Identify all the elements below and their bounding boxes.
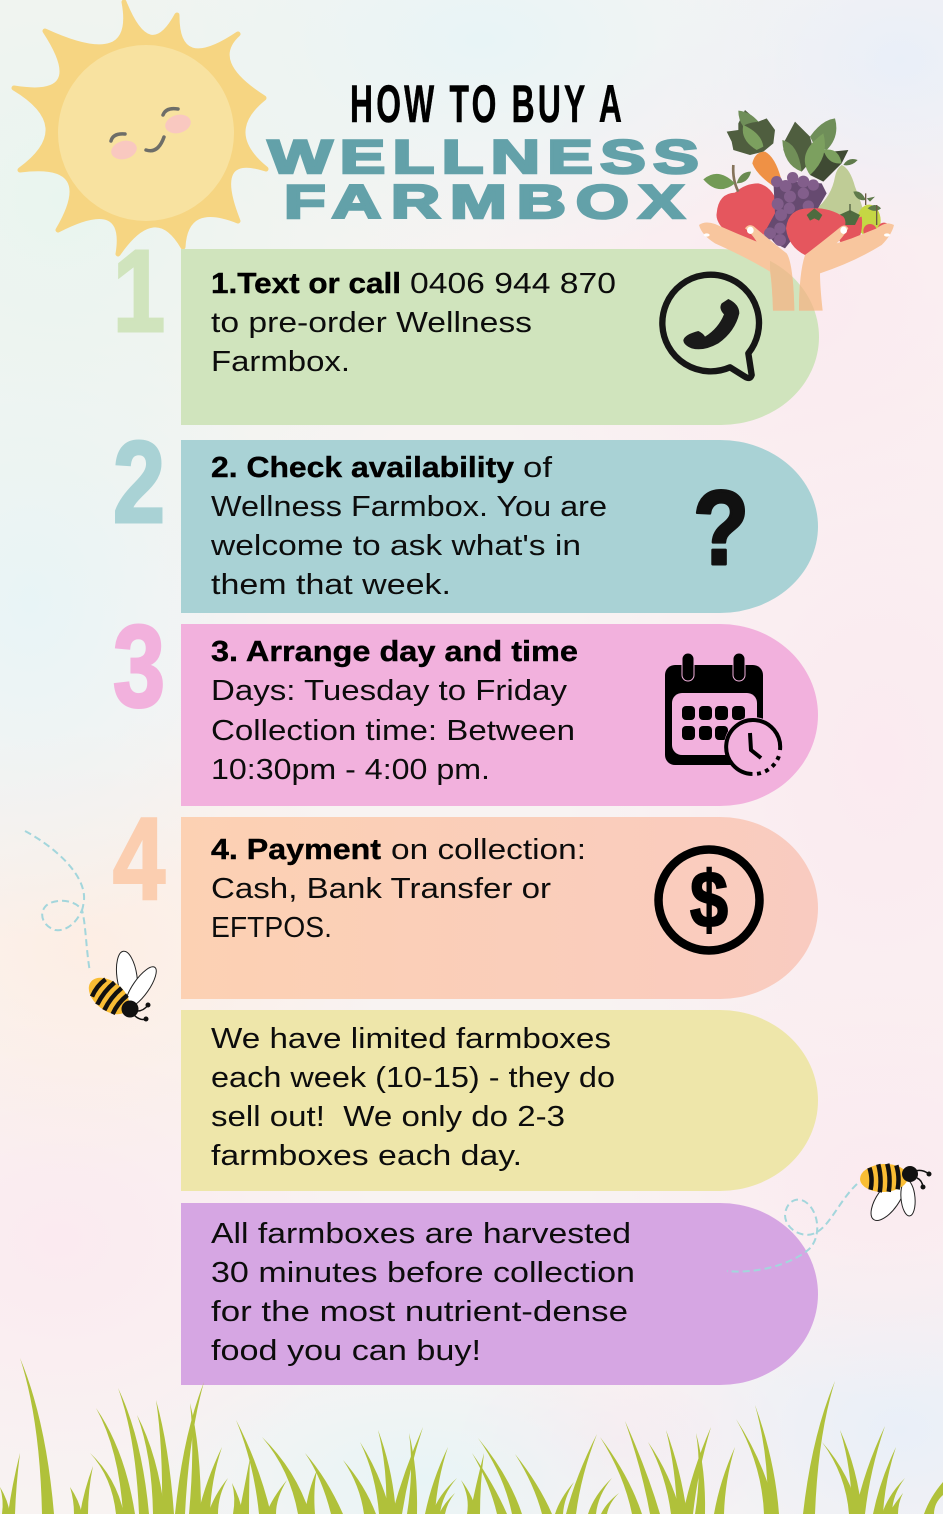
step 4 text: Cash, Bank Transfer or xyxy=(211,873,551,905)
step numeral 1: 1 xyxy=(113,226,165,356)
step 3 text: 3. Arrange day and time xyxy=(211,636,578,668)
step 2 text: welcome to ask what's in xyxy=(210,530,581,562)
panel: step 2 check availability xyxy=(181,440,818,613)
step 2 text: of xyxy=(523,452,553,484)
limited farmboxes text: We have limited farmboxes xyxy=(211,1023,611,1055)
step 1 text xyxy=(211,268,616,378)
icon: phone speech bubble xyxy=(662,275,759,378)
harvest text xyxy=(211,1218,635,1367)
panel: step 3 arrange day and time xyxy=(181,624,818,806)
panel: harvest note xyxy=(181,1203,818,1385)
icon: smiling sun xyxy=(14,2,266,254)
panel: step 1 text or call xyxy=(181,249,819,425)
step numeral 4: 4 xyxy=(113,794,165,924)
step 4 text xyxy=(211,834,586,944)
step 4 text: EFTPOS. xyxy=(211,912,332,944)
title line: farmbox: FARMBOX xyxy=(284,176,684,228)
limited farmboxes text: sell out! We only do 2-3 xyxy=(211,1101,565,1133)
icon: bee with dashed flight path, left xyxy=(25,831,161,1022)
limited farmboxes text xyxy=(211,1023,615,1172)
step 3 text xyxy=(211,636,578,786)
step numeral 2: 2 xyxy=(113,417,165,547)
harvest text: 30 minutes before collection xyxy=(211,1257,635,1289)
panel: limited farmboxes note xyxy=(181,1010,818,1191)
harvest text: for the most nutrient-dense xyxy=(211,1296,628,1328)
step 1 text: to pre-order Wellness xyxy=(211,307,532,339)
step 2 text: them that week. xyxy=(211,569,451,601)
icon: dollar coin xyxy=(658,850,760,950)
icon: bee with dashed flight path, right xyxy=(727,1163,932,1272)
step 3 text: Collection time: Between xyxy=(211,715,575,747)
step 2 text: 2. Check availability xyxy=(211,452,514,484)
icon: question mark: ? xyxy=(693,470,749,587)
step 2 text xyxy=(210,452,607,601)
limited farmboxes text: farmboxes each day. xyxy=(211,1140,522,1172)
title line: how to buy a: HOW TO BUY A xyxy=(350,75,622,134)
step 1 text: Farmbox. xyxy=(211,346,350,378)
step 2 text: Wellness Farmbox. You are xyxy=(211,491,607,523)
step 4 text: 4. Payment xyxy=(211,834,381,866)
harvest text: food you can buy! xyxy=(211,1335,481,1367)
harvest text: All farmboxes are harvested xyxy=(211,1218,631,1250)
step 3 text: 10:30pm - 4:00 pm. xyxy=(211,754,490,786)
step numeral 3: 3 xyxy=(113,601,165,731)
step 1 text: 0406 944 870 xyxy=(410,268,616,300)
step 1 text: 1.Text or call xyxy=(211,268,401,300)
limited farmboxes text: each week (10-15) - they do xyxy=(211,1062,615,1094)
icon: dollar coin: $ xyxy=(690,855,728,944)
step 3 text: Days: Tuesday to Friday xyxy=(211,675,568,707)
title line: wellness: WELLNESS xyxy=(268,131,699,183)
title xyxy=(268,75,699,228)
icon: calendar with clock xyxy=(665,653,782,775)
icon: hands holding fruit and vegetables xyxy=(699,110,894,311)
step 4 text: on collection: xyxy=(391,834,586,866)
grass xyxy=(0,1358,943,1514)
panel: step 4 payment xyxy=(181,817,818,999)
